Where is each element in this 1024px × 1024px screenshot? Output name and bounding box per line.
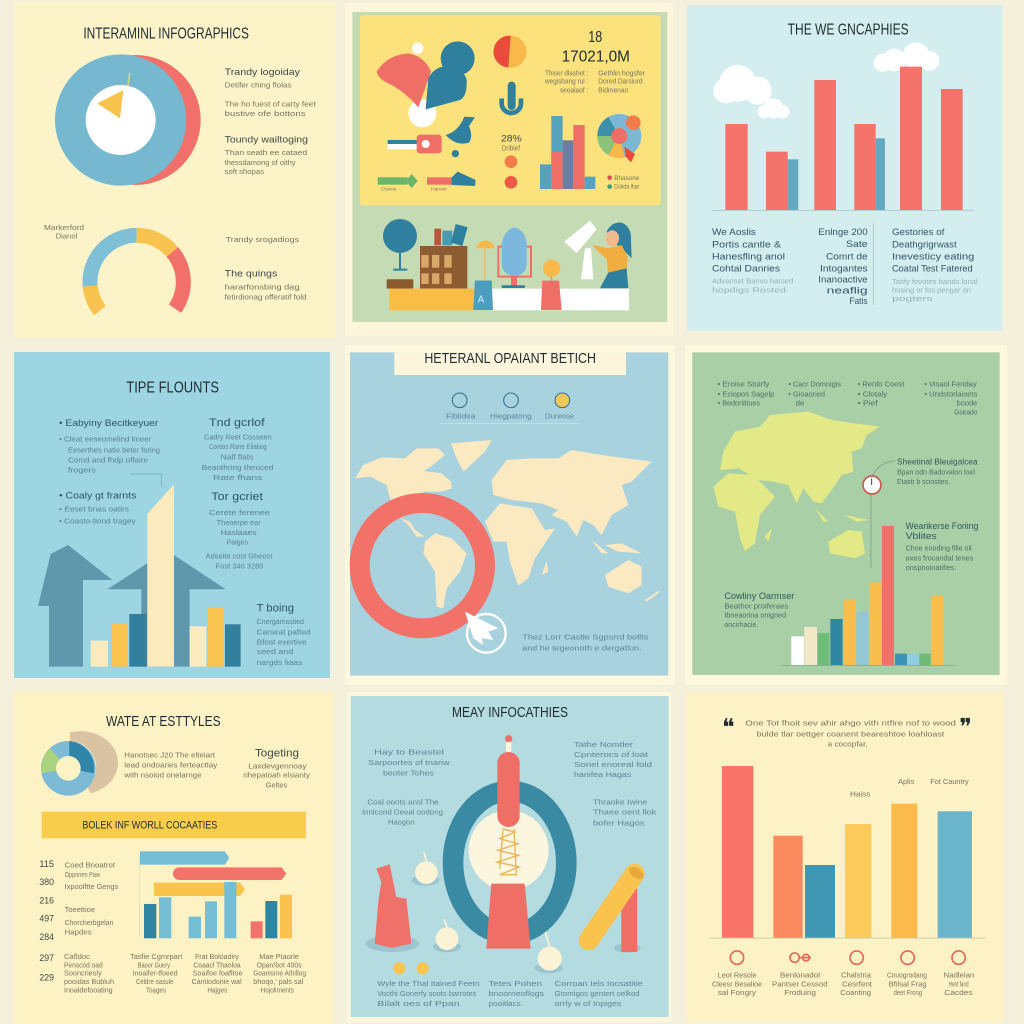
numbers: 229 <box>39 972 54 982</box>
text block: lower notes: fetirdionag offeratif fold <box>225 292 307 301</box>
panel: arrows and bars <box>14 352 330 678</box>
stat notes: Thiser dlashet : <box>545 68 588 77</box>
bottom column 2: Cantiodonie wal <box>192 977 242 986</box>
text block: right middle: Fost 340 3285 <box>216 561 263 570</box>
chart labels: Aplis <box>898 777 915 786</box>
note: world ranking: Choe enoding fille oil <box>906 543 972 552</box>
text block: lower right: seed and <box>257 647 293 656</box>
donut chart <box>41 731 118 796</box>
text column 3: Inevesticy eating <box>892 251 974 261</box>
quote: ❞ <box>959 714 972 740</box>
number notes: Ixpoolftte Gengs <box>65 882 119 891</box>
text block: upper right: Thraoke Iwine <box>593 798 647 807</box>
chart labels: Haiss <box>850 790 871 799</box>
bottom column 2 <box>192 952 243 995</box>
stat notes <box>544 68 645 94</box>
percent stat <box>501 133 522 189</box>
caption columns: deet Frong <box>894 988 922 997</box>
numbers: 380 <box>39 877 54 887</box>
text block: left middle: • Coasto-tiond tragey <box>59 516 136 525</box>
legend icons: Dureose <box>545 412 574 421</box>
text block: upper left: Innlcond Deeal oodong <box>362 808 443 817</box>
text column 2: neaflig <box>827 285 868 295</box>
green arrow: Charoe <box>381 187 397 193</box>
number notes: pooidas Bubluh <box>64 977 114 986</box>
top bullet lists: • Pief <box>858 399 879 408</box>
text block: left top: frogers <box>68 465 96 474</box>
caption columns: Benlonadol <box>780 970 820 979</box>
text block: upper left: beoter Tohes <box>383 768 434 777</box>
text block: left top: • Cleat eeseomelind lmeer <box>59 435 152 444</box>
gantt arrows <box>139 851 286 938</box>
title: THE WE GNCAPHIES <box>788 21 909 38</box>
illustration: bookcase <box>420 224 468 289</box>
note: country overview: Ibneaorina onigned <box>724 610 786 619</box>
icon: u shape <box>502 82 521 113</box>
top bullet lists: Goeado <box>954 407 977 416</box>
illustration: person with paper <box>564 221 632 288</box>
bottom text: pooitlacs. <box>489 999 523 1008</box>
number notes: Cafldoc <box>64 952 90 961</box>
text block: right middle: Haslaaes <box>221 528 257 537</box>
text block: left top: Eeserthes natie beter foring <box>68 445 160 454</box>
world map <box>355 440 660 608</box>
text block: right top: Beanthring theuced <box>202 463 273 472</box>
top bullet lists: • Undstorlaisets <box>924 389 978 398</box>
text block: upper left: Sarpoortes of tnariw <box>368 758 451 767</box>
togethings text: rihepatoah elsianty <box>243 771 310 780</box>
note: country overview <box>724 591 794 629</box>
text column 1: hopdigs Rosted <box>712 286 786 295</box>
text block: upper left: Hasgon <box>388 818 415 827</box>
quote: a cocopfar, <box>828 740 868 749</box>
text block: lower right: Cnergamsstied <box>257 617 304 626</box>
yellow banner: BOLEK INF WORLL COCAATIES <box>82 820 218 832</box>
legend icons: Fiblidea <box>446 412 477 421</box>
caption columns: Chalstria <box>841 970 872 979</box>
panel: yellow and green scene <box>345 3 673 336</box>
numbers <box>39 859 54 982</box>
text block: right top: Contos Rane Eilatiog <box>209 442 267 451</box>
intro text: lead ondoaries ferteactlay <box>124 761 218 770</box>
text block: right top: Cadry Reet Cosseen <box>204 432 272 441</box>
text block: left middle: • Eeset bnas oatirs <box>59 504 129 513</box>
icons <box>730 951 965 964</box>
number notes: Sooncriesly <box>64 969 102 978</box>
text block: upper left <box>362 747 451 827</box>
title: INTERAMINL INFOGRAPHICS <box>83 25 249 42</box>
note: country overview: oncirhacie. <box>724 620 758 629</box>
number notes: Coed Bnoatrot <box>65 860 115 869</box>
top bullet lists: • Visaol Feriday <box>924 379 977 388</box>
togethings text: Togeting <box>255 747 299 759</box>
caption columns: Cacdes <box>944 988 973 997</box>
panel: world map with ring <box>345 345 675 685</box>
stat heading <box>562 29 630 65</box>
donut label: Dianol <box>56 232 78 241</box>
text block: upper right: bofer Hagos <box>593 818 645 827</box>
map <box>713 412 880 558</box>
text column 3: Gestories of <box>892 227 945 237</box>
number notes: Chorcherbgelan <box>65 918 113 927</box>
caption columns: Cleesr Besalioe <box>712 980 762 989</box>
illustration: lamp and vase <box>473 241 495 310</box>
red ring <box>360 503 485 628</box>
text block: top notes: bustive ofe bottons <box>225 109 306 118</box>
top bullet lists: boode <box>957 399 977 408</box>
header: HETERANL OPAIANT BETICH <box>424 351 596 367</box>
number notes: Oppnrien Paw <box>65 870 101 879</box>
rocket <box>486 735 531 949</box>
text block: left top: • Eabyiny Becitkeyuer <box>59 418 158 428</box>
stat heading: 17021,0M <box>562 48 630 65</box>
caption columns: Cnuogrodang <box>887 970 927 979</box>
stat heading: 18 <box>588 29 602 46</box>
bottom text <box>377 979 643 1008</box>
percent stat: 28% <box>501 133 522 143</box>
panel: donut and gantt <box>14 692 334 1024</box>
bottom column 2: Soaifoe foafltoe <box>193 969 243 978</box>
half donut chart <box>90 235 183 311</box>
numbers: 497 <box>39 914 54 924</box>
bottom text: orrly w of Inpiges <box>555 999 622 1008</box>
bulbs <box>393 852 563 974</box>
top bullet lists: • Eroise Stuirfy <box>718 379 770 388</box>
bottom column 3 <box>253 952 306 995</box>
text block: lower right: nargds fiaas <box>257 658 303 667</box>
stat notes: Dored Darsiurd <box>598 77 643 86</box>
top bullet lists: • Clotaly <box>858 389 888 398</box>
caption <box>522 633 649 652</box>
bar chart <box>712 67 974 211</box>
legend: Dolida lhar <box>614 184 639 191</box>
bottom column 3: Hojoliments <box>261 986 294 995</box>
top bullet lists: • Eciopos Sagelp <box>718 389 774 398</box>
header <box>394 351 626 375</box>
illustration: tree <box>383 219 417 289</box>
text block: right middle: Cerete ferenee <box>209 508 270 517</box>
stat notes: wegisbang rul : <box>544 77 588 86</box>
donut label: Markerford <box>44 223 84 232</box>
intro text <box>123 751 218 780</box>
text column 2: Comrt de <box>826 251 868 261</box>
text column 1: Advanset Banvo harsed <box>712 276 793 285</box>
numbers: 115 <box>39 859 54 869</box>
text block: top notes: Trandy logoiday <box>225 67 300 77</box>
title: TIPE FLOUNTS <box>126 379 219 396</box>
text block: left top <box>59 418 160 474</box>
text column 3 <box>892 227 978 303</box>
red and blue arrow <box>427 172 476 193</box>
number notes: Hapdes <box>65 928 92 937</box>
text column 1: Portis cantle & <box>712 239 782 249</box>
note: country overview: Beathor proiferaes <box>724 601 789 610</box>
text block: right top <box>202 417 273 482</box>
panel: rocket and ring <box>347 692 671 1022</box>
quote <box>722 714 972 749</box>
panel: bar chart with clouds <box>687 5 1003 331</box>
bottom column 2: Hajges <box>207 986 228 995</box>
caption columns <box>712 970 974 997</box>
text block: lower notes <box>225 235 307 301</box>
leader line <box>131 474 161 487</box>
bottom column 1: Baoor Guery <box>138 961 170 970</box>
caption: and he tegeonoth e dergatlun. <box>522 643 642 652</box>
note: regional message: Etastr b sciosties. <box>897 477 950 486</box>
illustration: table <box>389 281 629 310</box>
text block: top notes <box>225 67 316 176</box>
note: country overview: Cowliny Oarmser <box>724 591 794 601</box>
number notes: Inoaldefooating <box>64 986 113 995</box>
bottom column 1: Celdre oasule <box>136 977 173 986</box>
text block: left top: Comd and fhdp offaire <box>68 455 148 464</box>
text column 1 <box>712 227 793 295</box>
text block: left middle <box>59 490 137 525</box>
illustration: blue bottle on stand <box>498 227 531 288</box>
bottom column 3: Mae Ptaorle <box>259 952 299 961</box>
text block: lower notes: The quings <box>225 269 278 279</box>
legend icons: Hiegpatong <box>490 412 532 421</box>
clouds <box>713 42 939 118</box>
text block: lower notes: hararfonsbing dag <box>225 282 300 291</box>
caption columns: Froduing <box>784 988 816 997</box>
caption columns: Bfilsal Frag <box>889 980 927 989</box>
text block: upper right: hanifea Hagas <box>574 770 632 779</box>
caption columns: sal Fongry <box>718 988 756 997</box>
bottom column 1: Inoaifer-tfoeed <box>133 969 178 978</box>
text block: top notes: thessdamong of oithy <box>225 158 296 167</box>
text block: right middle: Tor gcriet <box>211 491 263 503</box>
panel: quote and bars <box>686 692 1003 1022</box>
text block: upper right: Thaee oent llok <box>593 808 657 817</box>
title: MEAY INFOCATHIES <box>452 705 568 721</box>
text column 3: Tatify fovotes hands lonal <box>892 277 978 286</box>
caption columns: Leot Resole <box>718 970 757 979</box>
numbers: 216 <box>39 895 54 905</box>
text column 3: Coatal Test Fatered <box>892 264 973 274</box>
bottom text: Bilalt oes of Ppan <box>377 999 460 1008</box>
text block: left middle: • Coaly gt frarnts <box>59 490 137 500</box>
icon: bird <box>446 117 475 157</box>
icon: white pointer <box>465 612 506 653</box>
caption columns: Hent fand <box>949 980 969 989</box>
note: world ranking: oxes frocandal tenes <box>906 553 974 562</box>
text block: lower notes: Trandy srogadiogs <box>226 235 299 244</box>
text block: right middle <box>206 491 272 570</box>
top bullet lists: • Bedonlitues <box>718 399 760 408</box>
note: world ranking: Wearikerse Foriing <box>906 521 978 531</box>
panel: donut infographics <box>14 2 336 337</box>
bar chart <box>782 526 955 666</box>
caption: Thez Lorr Castle Sgpsrrd bollts <box>522 633 649 642</box>
numbers: 284 <box>39 932 54 942</box>
note: regional message: Bpan odn Badovalon loel <box>897 467 975 476</box>
stat notes: Bidmenan <box>598 85 628 94</box>
ring <box>453 791 566 934</box>
bar chart <box>709 766 985 939</box>
text block: upper right: Soriel enoreal fold <box>574 760 652 769</box>
pie icon <box>493 36 527 68</box>
bottom text: Corroan Iels Iocsatitie <box>555 979 643 988</box>
bottom text: Wyle the Thal Itained Feetn <box>377 979 480 988</box>
togethings text: Geltes <box>266 781 288 790</box>
chart labels <box>850 777 969 799</box>
text block: top notes: Detifer ching flolas <box>225 80 292 89</box>
intro text: with nsoiod onelarnge <box>123 771 202 780</box>
bar chart <box>144 882 292 938</box>
donut label <box>44 223 84 241</box>
abstract blobs <box>377 41 475 127</box>
text block: upper left: Coal ooots ansl The <box>367 798 439 807</box>
text column 2: Sate <box>846 239 868 249</box>
note: regional message: Sheetinal Bleuigalcea <box>897 456 978 466</box>
text block: upper right <box>574 740 657 827</box>
text block: upper right: Cpnterocs of loat <box>574 750 648 759</box>
caption columns: Cesrfent <box>842 980 872 989</box>
bottom column 3: bhoqo,' pals sal <box>253 977 304 986</box>
text block: right middle: Paiges <box>227 538 248 547</box>
text block: right middle: Adseite cost Gheost <box>206 551 272 560</box>
caption columns: Pantser Cessod <box>772 980 828 989</box>
legend: Bhasone <box>614 175 640 182</box>
note: world ranking: Vblites <box>906 531 937 541</box>
bottom text: Gtomigos gentert oelkod <box>555 989 640 998</box>
wheel chart <box>597 114 641 162</box>
illustration: flower vase <box>541 260 562 310</box>
caption columns: Nadleian <box>944 970 974 979</box>
top bullet lists <box>718 379 978 416</box>
text block: lower right <box>257 603 311 667</box>
bottom column 1: Tasfie Cgmrpart <box>130 952 182 961</box>
top bullet lists: de <box>796 399 804 408</box>
text block: top notes: soft shopas <box>225 167 264 176</box>
bottom column 2: Frat Boloadiry <box>195 952 239 961</box>
intro text: Hanotsec J20 The elteiart <box>124 751 215 760</box>
caption columns: Coanting <box>840 988 871 997</box>
text column 3: Deathgrigrwast <box>892 239 957 249</box>
text column 2: Intogantes <box>820 264 868 274</box>
text column 3: hosing or fos pengar on <box>892 286 971 295</box>
quote: bulde tlar oettger coanent beareshtoe loahloast <box>757 730 944 739</box>
bottom column 1 <box>130 952 182 995</box>
pie chart with crescent <box>55 54 201 186</box>
text block: upper left: Hay to Beastel <box>374 747 445 756</box>
panel: green map and bars <box>685 345 1007 685</box>
numbers: 297 <box>39 953 54 963</box>
top bullet lists: • Gioaoried <box>788 389 825 398</box>
text block: top notes: Toundy wailtoging <box>225 135 308 145</box>
illustration: table: A <box>478 295 485 306</box>
text block: lower right: Bfost exertive <box>257 637 307 646</box>
text column 3: pogters <box>892 294 933 303</box>
text column 1: We Aoslis <box>712 227 756 237</box>
text block: upper right: Tathe Nomtler <box>574 740 634 749</box>
center circle <box>469 810 549 890</box>
chart labels: Fot Cauntry <box>930 777 969 786</box>
bars <box>91 608 241 667</box>
green arrow <box>378 174 418 193</box>
text column 2 <box>818 227 868 306</box>
text block: right middle: Theoerpe ear <box>217 518 261 527</box>
text block: lower right: Carseat pafted <box>257 627 311 636</box>
bottom text: Vocthi Gonerfy soots barrotes <box>377 989 477 998</box>
number notes: Toeettioe <box>65 905 95 914</box>
number notes <box>64 860 119 995</box>
top bullet lists: • Renfo Coest <box>858 379 904 388</box>
togethings text <box>243 747 310 790</box>
text column 1: Cohtal Danries <box>712 264 780 274</box>
red and blue arrow: Hanow <box>431 187 447 193</box>
stat notes: seoalaof : <box>560 85 588 94</box>
yellow banner <box>42 812 306 838</box>
text block: top notes: The ho fuest of carty feet <box>225 100 316 109</box>
bottom column 3: Goanisme Athillog <box>253 969 306 978</box>
quote: One Tot fhoit sev ahir ahgo vith ntfire nof to wood <box>745 719 956 728</box>
text column 2: Inanoactive <box>818 275 868 285</box>
bottom column 2: Coaacl Thaoloa <box>193 961 241 970</box>
legend icons <box>440 393 578 424</box>
clock marker <box>863 461 895 568</box>
stat notes: Gethlin hogsfer <box>598 68 645 77</box>
text block: right top: Rate fhans <box>213 473 263 482</box>
text column 1: Hanesfling anol <box>712 251 785 261</box>
bottom text: Tetes Pohen <box>489 979 542 988</box>
number notes: Penscod oad <box>64 961 103 970</box>
icon: key shape <box>388 135 442 153</box>
note: world ranking <box>906 521 978 572</box>
bottom text: bnoorneoflogs <box>489 989 544 998</box>
percent stat: Driblef <box>502 143 521 152</box>
yellow tube <box>589 865 646 953</box>
top bullet lists: • Cacr Domnigis <box>788 379 841 388</box>
arrows <box>38 484 226 667</box>
togethings text: Laxdevgennoay <box>248 762 307 771</box>
text column 2: Enlnge 200 <box>818 227 868 237</box>
bottom column 1: Toages <box>146 986 166 995</box>
quote: ❝ <box>722 714 735 740</box>
note: world ranking: onspnoinatifies. <box>906 563 957 572</box>
text block: right top: Nalf flats <box>221 453 254 462</box>
cone left <box>366 864 419 952</box>
title: WATE AT ESTTYLES <box>106 714 221 730</box>
note: regional message <box>897 456 978 486</box>
text column 2: Fatis <box>849 296 868 306</box>
text block: top notes: Than seath ee cataed <box>225 148 307 157</box>
text block: right top: Tnd gcrlof <box>209 417 265 429</box>
legend <box>607 175 640 191</box>
text block: lower right: T boing <box>257 603 294 615</box>
bottom column 3: Opan/bot 400s <box>257 961 302 970</box>
bar chart <box>540 116 595 189</box>
